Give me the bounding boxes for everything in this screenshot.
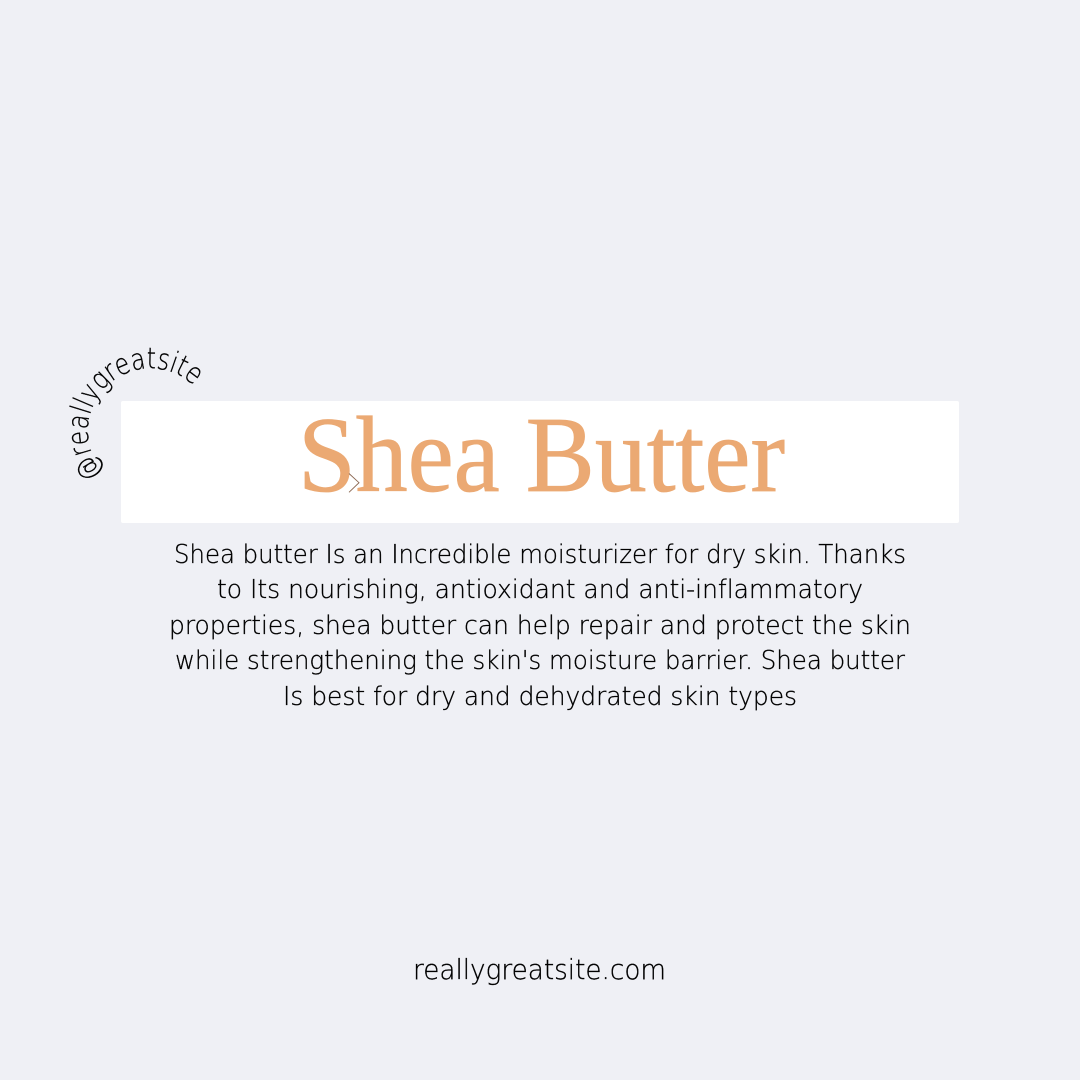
description text block: to Its nourishing, antioxidant and anti-inflammatory [217, 575, 863, 605]
icon: small chevron [349, 474, 359, 492]
description text block: properties, shea butter can help repair and protect the skin [169, 611, 911, 641]
description text block: while strengthening the skin's moisture barrier. Shea butter [175, 646, 905, 676]
description text block [169, 540, 911, 712]
footer website: reallygreatsite.com [413, 954, 666, 986]
panel: white title card [121, 401, 959, 523]
title: Shea Butter [298, 396, 785, 515]
description text block: Is best for dry and dehydrated skin types [283, 682, 797, 712]
curved handle text: @reallygreatsite [69, 348, 200, 478]
description text block: Shea butter Is an Incredible moisturizer for dry skin. Thanks [174, 540, 906, 570]
